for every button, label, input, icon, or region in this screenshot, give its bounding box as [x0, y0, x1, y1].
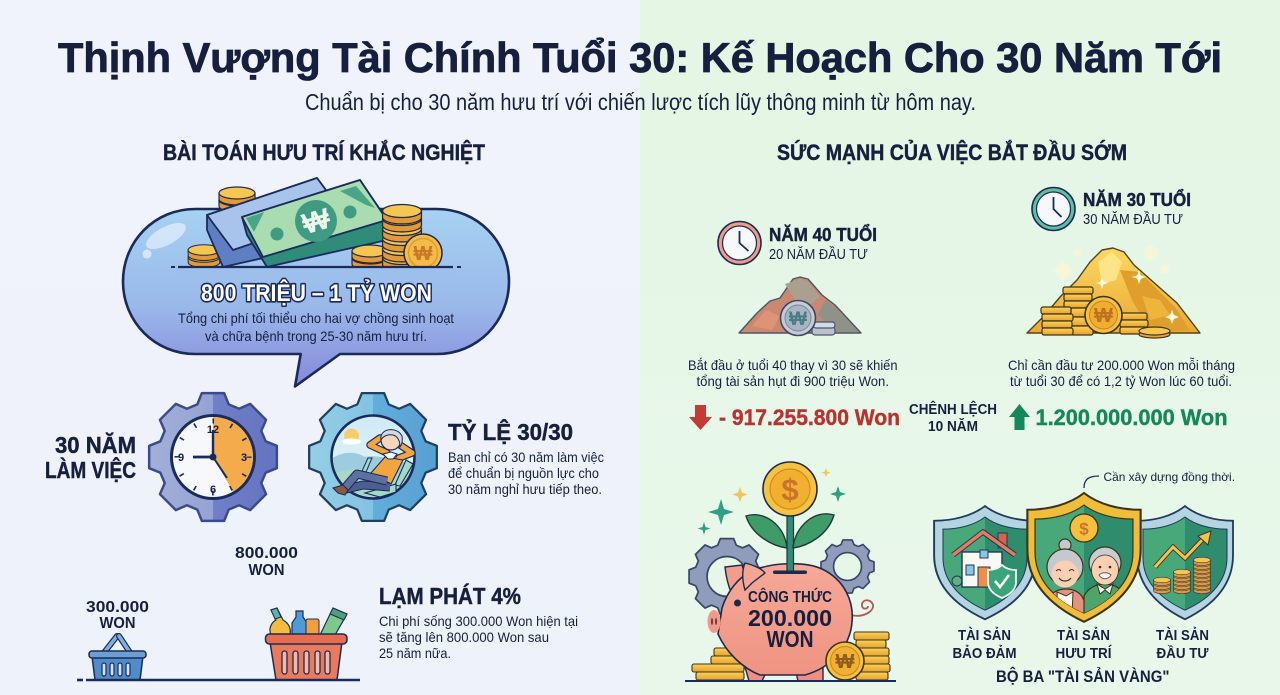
icon: money pile: ₩: [299, 203, 334, 241]
arrow: up green: [1009, 404, 1030, 430]
text: age 30 description: [1008, 357, 1235, 389]
arrow: down red: [689, 405, 712, 430]
text: age 40 description: [688, 357, 898, 389]
text: 30/30 ratio: TỶ LỆ 30/30: [448, 417, 573, 445]
label: 10-year gap: CHÊNH LỆCH: [909, 400, 997, 418]
text: 30/30 ratio: Bạn chỉ có 30 năm làm việc: [448, 449, 604, 465]
text: 30/30 ratio: để chuẩn bị nguồn lực cho: [448, 465, 599, 481]
label: 800,000 won: [235, 545, 298, 579]
icon: red clock: [718, 222, 761, 264]
icon: small rock pile with silver coin: ₩: [789, 309, 807, 330]
text: 4% inflation: LẠM PHÁT 4%: [379, 582, 521, 609]
label: age 30: NĂM 30 TUỔI: [1083, 189, 1191, 210]
label: security assets: BẢO ĐẢM: [952, 645, 1016, 662]
text: 4% inflation: sẽ tăng lên 800.000 Won sau: [379, 629, 549, 645]
text: age 40 description: Bắt đầu ở tuổi 40 thay vì 30 sẽ khiến: [688, 357, 898, 373]
label: 800,000 won: WON: [248, 562, 284, 579]
icon: piggy bank with plant and coins: ₩: [836, 651, 855, 673]
label: 30 years of work: [45, 431, 136, 483]
label: 30 years of work: 30 NĂM: [55, 431, 136, 458]
icon: gear with clock: 6: [210, 484, 216, 496]
note: build simultaneously: [1084, 470, 1235, 488]
icon: gold pile with coins: ₩: [1094, 305, 1113, 327]
note: build simultaneously: Cần xây dựng đồng thời.: [1104, 470, 1235, 484]
label: 300,000 won: WON: [100, 615, 136, 632]
label: 10-year gap: [909, 400, 997, 435]
piggy label: [748, 588, 832, 652]
icon: gold pile with coins: [1027, 245, 1200, 338]
label: retirement assets: HƯU TRÍ: [1056, 645, 1112, 662]
icon: gear with clock: 3: [241, 452, 247, 464]
text: 4% inflation: Chi phí sống 300.000 Won hiện tại: [379, 613, 578, 629]
text: 4% inflation: 25 năm nữa.: [379, 645, 451, 661]
icon: security shield with house: [934, 506, 1036, 619]
figure: shortfall: - 917.255.800 Won: [719, 405, 900, 430]
label: 10-year gap: 10 NĂM: [928, 418, 978, 435]
text: age 30 description: từ tuổi 30 để có 1,2 tỷ Won lúc 60 tuổi.: [1010, 373, 1232, 389]
title: Thịnh Vượng Tài Chính Tuổi 30: Kế Hoạch Cho 30 Năm Tới: [58, 34, 1222, 81]
icon: money pile: ₩: [414, 243, 433, 265]
bubble description: Tổng chi phí tối thiểu cho hai vợ chồng sinh hoạt: [178, 310, 454, 326]
caption: golden asset trio: BỘ BA "TÀI SẢN VÀNG": [996, 667, 1170, 686]
icon: small blue basket: [89, 636, 146, 680]
panel: power of starting early: [685, 140, 1235, 686]
heading: left: BÀI TOÁN HƯU TRÍ KHẮC NGHIỆT: [163, 140, 485, 165]
label: investment assets: ĐẦU TƯ: [1156, 645, 1209, 662]
panel: retirement problem: [45, 140, 604, 680]
label: age 40: NĂM 40 TUỔI: [769, 224, 877, 245]
subtitle: Chuẩn bị cho 30 năm hưu trí với chiến lược tích lũy thông minh từ hôm nay.: [305, 89, 976, 115]
heading: right: SỨC MẠNH CỦA VIỆC BẮT ĐẦU SỚM: [777, 140, 1127, 165]
text: 30/30 ratio: 30 năm nghỉ hưu tiếp theo.: [448, 481, 602, 497]
label: 300,000 won: 300.000: [86, 599, 149, 616]
label: 30 years of work: LÀM VIỆC: [45, 456, 136, 483]
label: 300,000 won: [86, 599, 149, 632]
text: 4% inflation: [379, 582, 578, 661]
label: retirement assets: [1056, 627, 1112, 662]
icon: retirement shield with couple: $: [1079, 520, 1089, 538]
label: age 40: 20 NĂM ĐẦU TƯ: [769, 246, 868, 263]
label: investment assets: TÀI SẢN: [1156, 627, 1209, 644]
piggy label: WON: [766, 626, 814, 652]
icon: small rock pile with silver coin: [739, 277, 861, 336]
icon: large red basket: [266, 608, 347, 680]
icon: green clock: [1032, 188, 1075, 230]
bubble description: [178, 310, 454, 344]
icon: gear with clock: [149, 393, 277, 521]
text: 30/30 ratio: [448, 417, 604, 497]
icon: gear with clock: 12: [207, 424, 219, 436]
piggy label: CÔNG THỨC: [748, 588, 832, 606]
figure: total: 1.200.000.000 Won: [1036, 405, 1228, 430]
amount: 800 TRIỆU – 1 TỶ WON: [201, 278, 432, 307]
label: retirement assets: TÀI SẢN: [1057, 627, 1110, 644]
icon: piggy bank with plant and coins: $: [781, 472, 799, 507]
piggy label: 200.000: [748, 605, 832, 631]
text: age 40 description: tổng tài sản hụt đi 900 triệu Won.: [696, 373, 889, 389]
icon: investment shield with growth arrow: [1137, 506, 1233, 619]
icon: gear with clock: 9: [178, 452, 184, 464]
icon: money pile: [171, 178, 461, 278]
icon: piggy bank with plant and coins: [685, 462, 896, 681]
label: age 30: 30 NĂM ĐẦU TƯ: [1083, 211, 1183, 228]
label: security assets: TÀI SẢN: [958, 627, 1011, 644]
icon: gear with relaxing retiree: [309, 393, 437, 521]
label: 800,000 won: 800.000: [235, 545, 298, 562]
text: age 30 description: Chỉ cần đầu tư 200.000 Won mỗi tháng: [1008, 357, 1235, 373]
icon: retirement shield with couple: [1027, 493, 1141, 622]
bubble description: và chữa bệnh trong 25-30 năm hưu trí.: [205, 328, 427, 344]
label: age 30: [1083, 189, 1191, 228]
label: age 40: [769, 224, 877, 263]
label: investment assets: [1156, 627, 1209, 662]
callout: speech bubble with total cost: [123, 178, 509, 386]
label: security assets: [952, 627, 1016, 662]
